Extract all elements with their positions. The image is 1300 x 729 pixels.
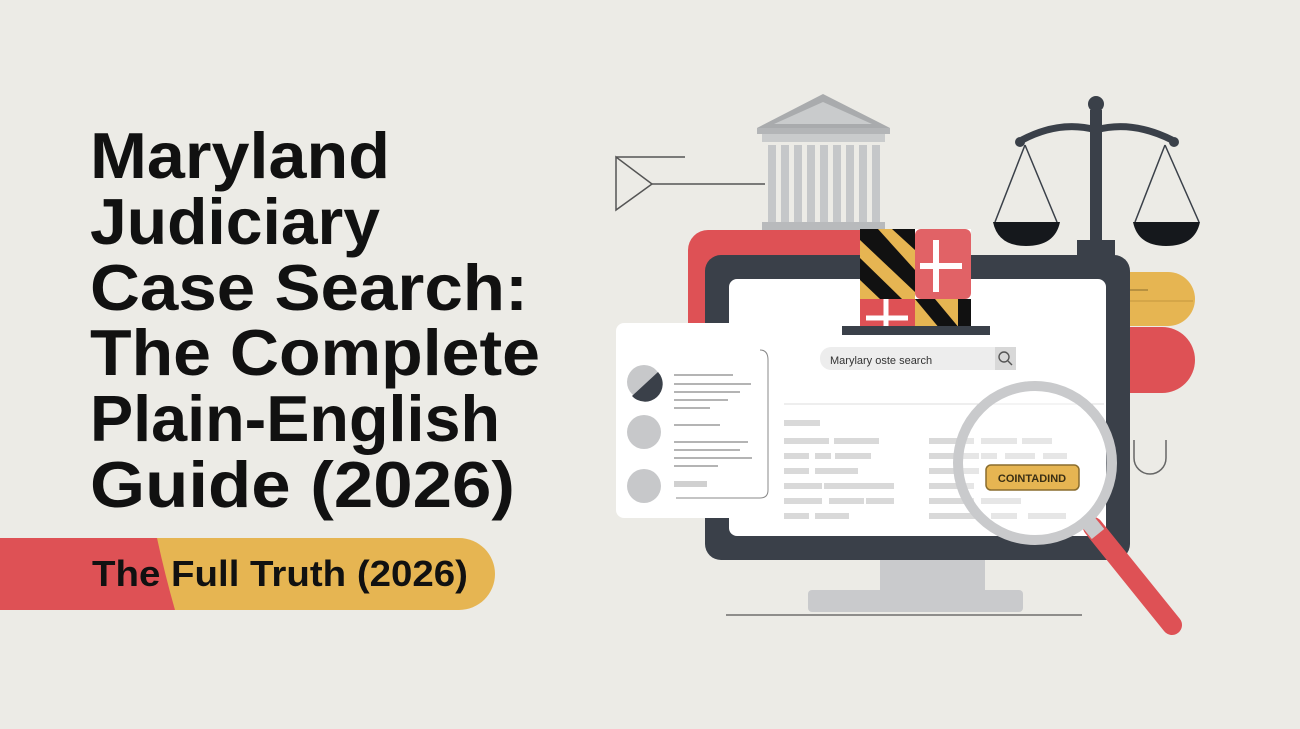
side pills <box>1110 272 1195 393</box>
search bar <box>820 347 1016 370</box>
icon: hook <box>1134 440 1166 474</box>
title: Maryland <box>90 119 390 192</box>
title: Case Search: <box>90 251 528 324</box>
results text lines <box>784 420 1067 519</box>
document panel <box>616 323 770 518</box>
search bar: Marylary oste search <box>830 355 932 367</box>
banner: subtitle <box>0 538 495 610</box>
icon: scales of justice <box>993 96 1200 256</box>
title: Guide (2026) <box>90 448 515 521</box>
title: The Complete <box>90 316 540 389</box>
title <box>90 119 540 521</box>
flag: Maryland <box>842 229 990 335</box>
title: Plain-English <box>90 382 500 455</box>
icon: courthouse <box>757 94 890 232</box>
banner: subtitle: The Full Truth (2026) <box>92 553 468 594</box>
red backdrop <box>688 230 870 345</box>
title: Judiciary <box>90 185 380 258</box>
icon: play triangle with line <box>616 157 765 210</box>
monitor <box>705 255 1130 615</box>
magnifying glass: COINTADIND <box>998 473 1066 485</box>
magnifying glass <box>958 386 1172 625</box>
